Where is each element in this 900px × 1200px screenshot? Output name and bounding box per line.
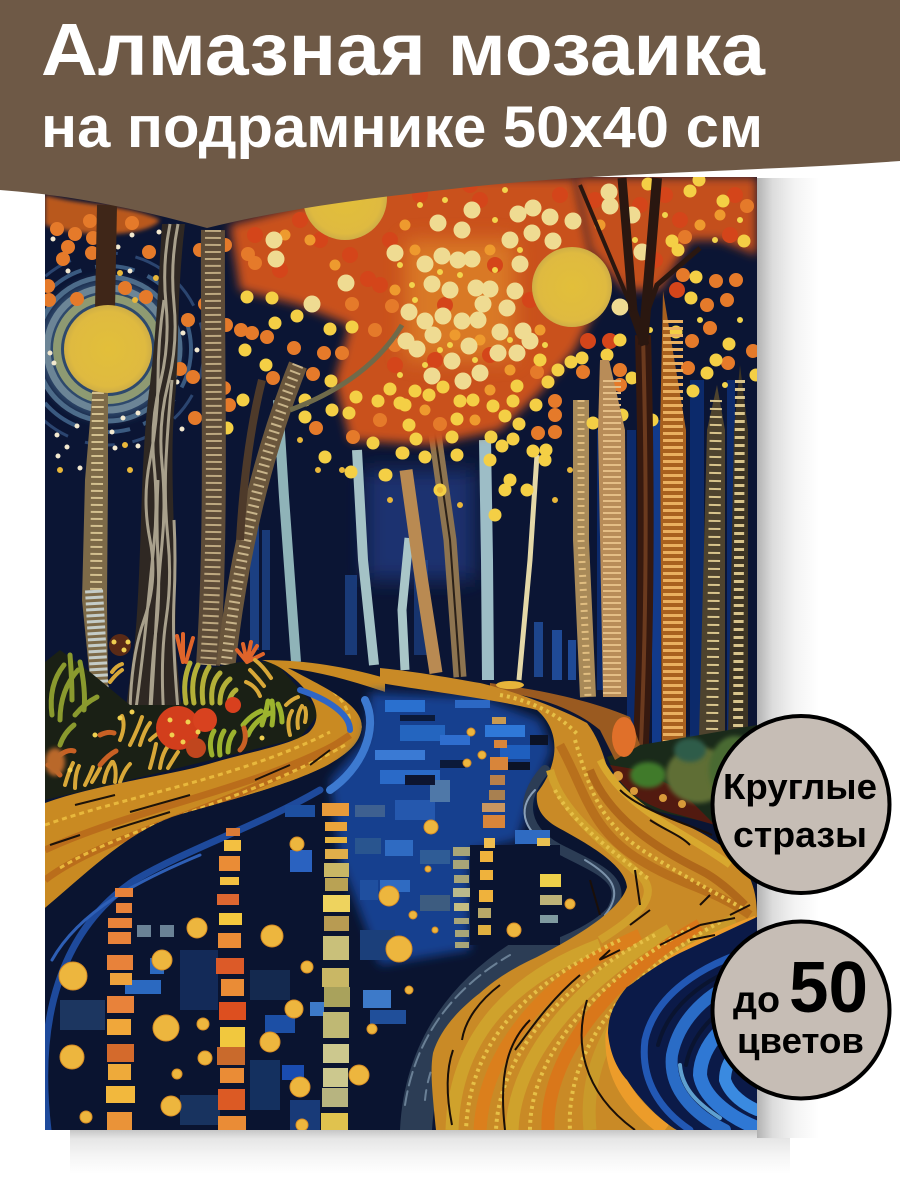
lower right water [608,917,757,1130]
background slim trees [278,400,588,697]
blue paint dabs [60,700,560,1130]
reflection column 3 [321,803,350,1130]
trunk: left moon tree [82,205,108,700]
golden path left [45,660,385,908]
golden path right [380,668,757,1130]
foreground trunks [82,178,748,767]
badge: up to 50 colours [712,922,890,1098]
badge: round rhinestones: Круглые [723,766,877,807]
moon halo swirl [45,252,202,446]
badge: up to 50 colours: цветов [737,1020,864,1061]
reflection column 2 [216,828,246,1130]
leaf dots [48,180,756,515]
reflection columns upper right [453,717,562,948]
badge: round rhinestones [712,716,890,893]
trunks: right stand [580,178,748,767]
header banner [0,0,900,228]
gold dots on water [59,728,575,1131]
canopy masses [45,177,757,445]
golden moons [64,196,612,393]
trunk: speckled trees [208,230,402,665]
subtitle: на подрамнике 50х40 см [41,95,763,160]
reflection column 1 [106,888,135,1130]
title: Алмазная мозаика [41,8,766,91]
badge: up to 50 colours: до [733,979,780,1020]
riverbank foliage [45,634,320,800]
right bank foliage [490,681,757,824]
badge: up to 50 colours: 50 [789,948,868,1028]
forest background [45,177,757,1130]
painting: night forest with river [12,156,761,1131]
canvas drop shadow [70,178,819,1174]
trunk: wavy striped tree [125,224,185,724]
badge: round rhinestones: стразы [733,814,867,855]
river [45,668,627,1131]
